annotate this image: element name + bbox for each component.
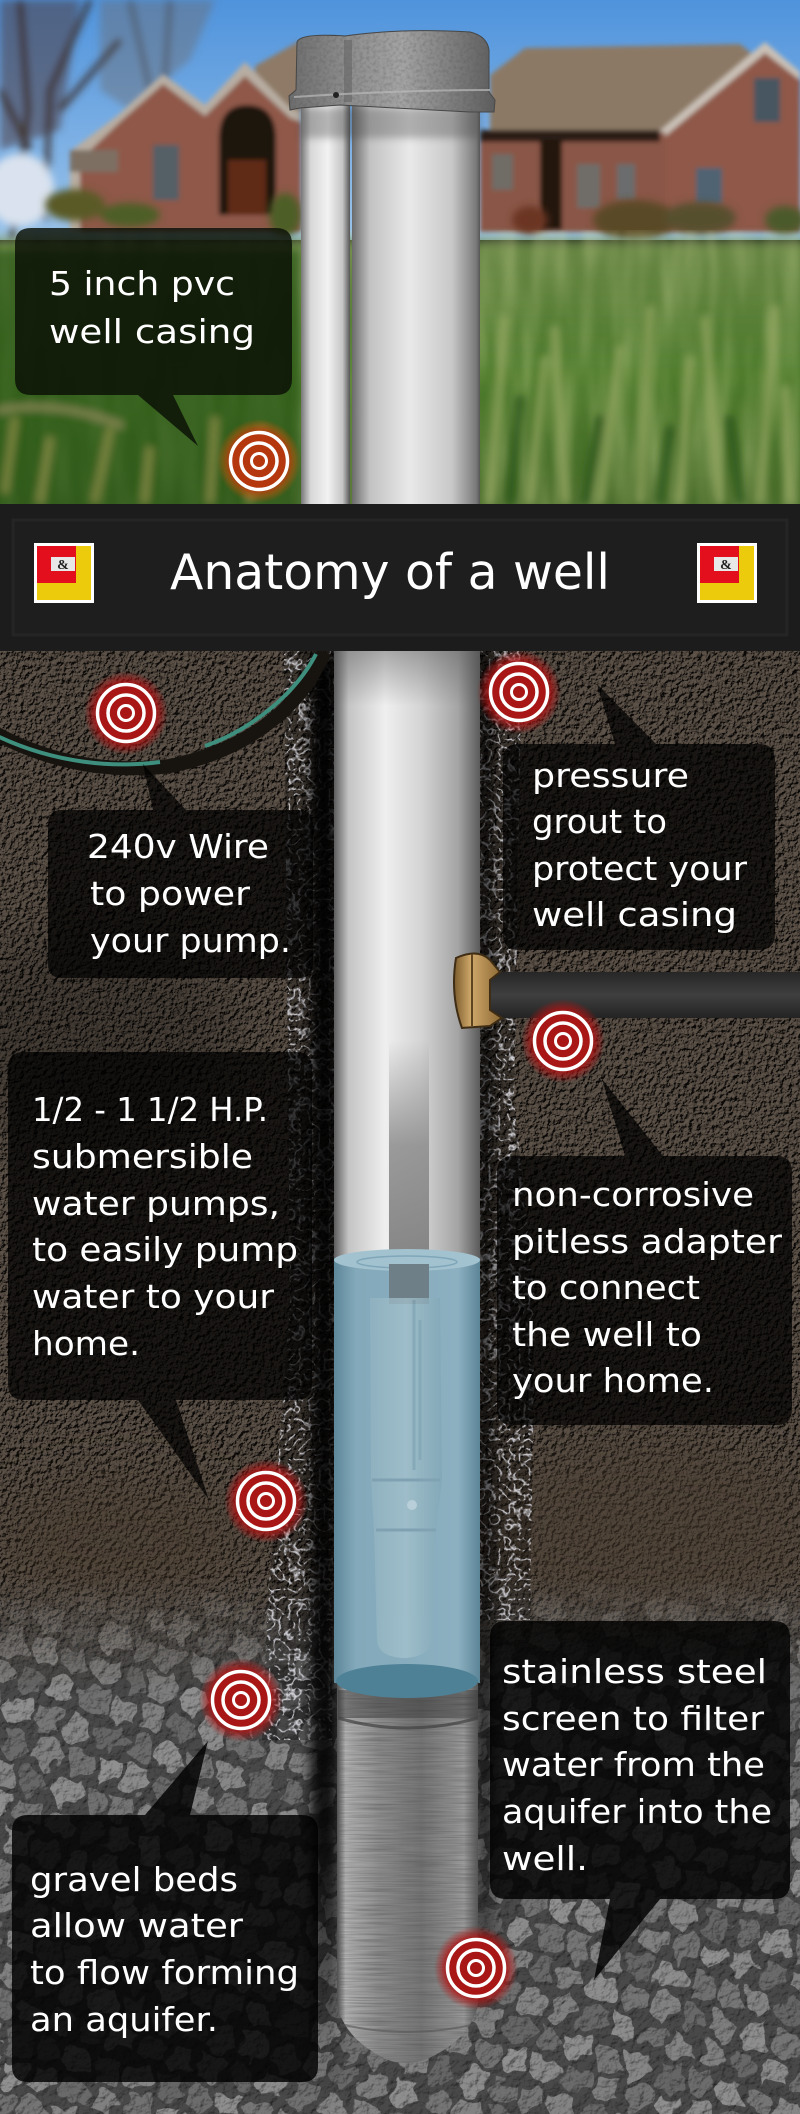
callout: pressure grout: protect your (532, 849, 747, 888)
callout: pressure grout: well casing (532, 895, 737, 934)
callout: pvc casing: 5 inch pvc (49, 264, 235, 303)
callout: gravel beds: allow water (30, 1906, 243, 1945)
callout: gravel beds (12, 1741, 318, 2082)
callout: submersible pumps (8, 1052, 312, 1500)
title banner (0, 504, 800, 651)
callout: submersible pumps: submersible (32, 1137, 253, 1176)
logo left: & (57, 558, 69, 573)
callout: stainless steel screen: screen to filter (502, 1699, 764, 1738)
target: pump (224, 1459, 308, 1543)
240v wire (0, 652, 324, 768)
title text: Anatomy of a well (170, 544, 610, 601)
target: gravel (199, 1658, 283, 1742)
logo right (697, 543, 757, 603)
callout: stainless steel screen: stainless steel (502, 1652, 767, 1691)
callout: pressure grout: grout to (532, 802, 667, 841)
submersible pump (370, 1298, 442, 1658)
callout: pressure grout (503, 684, 775, 950)
well casing, underground (334, 651, 480, 2063)
target: pitless adapter (521, 999, 605, 1083)
target: screen (434, 1926, 518, 2010)
bushes (45, 189, 800, 240)
callout: submersible pumps: 1/2 - 1 1/2 H.P. (32, 1090, 268, 1129)
callout: pitless adapter (497, 1079, 792, 1425)
callout: submersible pumps: home. (32, 1324, 140, 1363)
callout: pitless adapter: pitless adapter (512, 1222, 782, 1261)
callout: gravel beds: gravel beds (30, 1860, 238, 1899)
callout: 240v wire (48, 764, 313, 978)
scene: house and lawn above ground (0, 0, 800, 530)
logo right: & (720, 558, 732, 573)
lawn (0, 240, 800, 530)
callout: 240v wire: to power (90, 874, 250, 913)
callout: pvc casing: well casing (49, 312, 255, 351)
target: pvc casing (217, 419, 301, 503)
callout: 240v wire: your pump. (90, 921, 291, 960)
callout: pvc casing (15, 228, 292, 446)
target: grout (477, 650, 561, 734)
bare trees (0, 0, 215, 240)
callout: 240v wire: 240v Wire (87, 827, 269, 866)
stainless steel screen (336, 1664, 478, 2063)
callout: pitless adapter: non-corrosive (512, 1175, 754, 1214)
callout: pitless adapter: your home. (512, 1361, 714, 1400)
target: wire (84, 671, 168, 755)
pitless adapter and outlet pipe (454, 953, 800, 1028)
well cap (289, 31, 495, 112)
callout: gravel beds: an aquifer. (30, 2000, 218, 2039)
logo left (34, 543, 94, 603)
callout: stainless steel screen: water from the (502, 1745, 765, 1784)
well casing, above ground (289, 31, 495, 504)
callout: stainless steel screen: aquifer into the (502, 1792, 772, 1831)
callout: pressure grout: pressure (532, 756, 689, 795)
callout: pitless adapter: to connect (512, 1268, 700, 1307)
callout: stainless steel screen: well. (502, 1839, 588, 1878)
soil layer (0, 651, 800, 1691)
callout: gravel beds: to flow forming (30, 1953, 299, 1992)
water column (334, 1249, 480, 1683)
callout: submersible pumps: water pumps, (32, 1184, 280, 1223)
house (70, 40, 800, 232)
callout: pitless adapter: the well to (512, 1315, 702, 1354)
callout: stainless steel screen (490, 1621, 790, 1980)
callout: submersible pumps: water to your (32, 1277, 274, 1316)
gravel layer (0, 1540, 800, 2114)
grout around the casing (262, 651, 534, 2078)
drop pipe (389, 1040, 429, 1305)
sky (0, 0, 800, 240)
callout: submersible pumps: to easily pump (32, 1230, 298, 1269)
